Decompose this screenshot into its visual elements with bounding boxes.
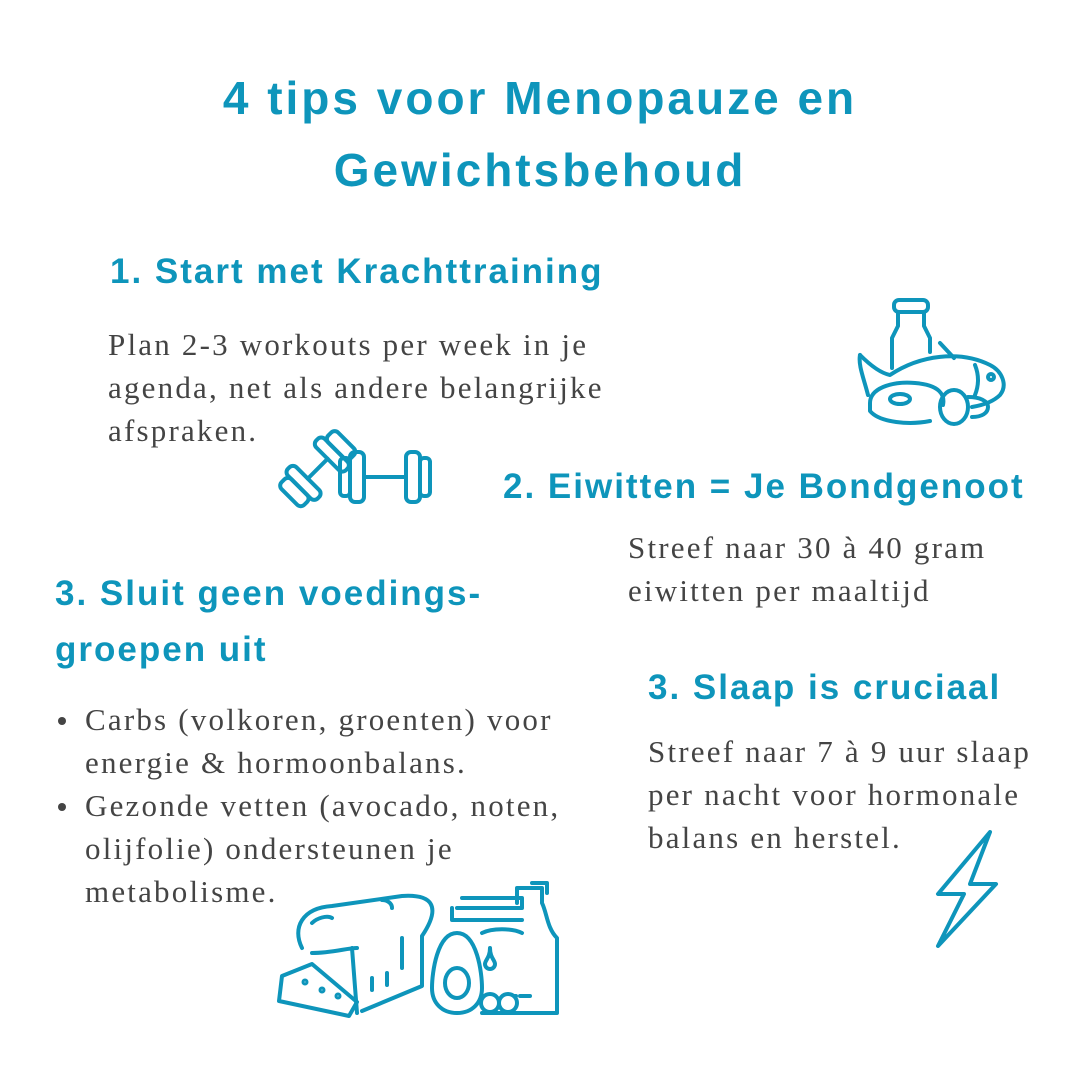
text 1: agenda, net als andere belangrijke [108,370,604,405]
heading 3: 3. Sluit geen voedings- [55,574,482,613]
title: Gewichtsbehoud [334,144,746,196]
bullet list [58,702,560,909]
text 4: Streef naar 7 à 9 uur slaap [648,734,1031,769]
text 1: afspraken. [108,413,258,448]
title: 4 tips voor Menopauze en [223,72,857,124]
text 4 [648,734,1031,855]
heading 2: 2. Eiwitten = Je Bondgenoot [503,467,1025,506]
heading 3: groepen uit [55,630,268,669]
bullet list: Gezonde vetten (avocado, noten, [85,788,560,823]
heading 1: 1. Start met Krachttraining [110,252,604,291]
bullet list: energie & hormoonbalans. [85,745,467,780]
bullet list: olijfolie) ondersteunen je [85,831,454,866]
bullet list: Carbs (volkoren, groenten) voor [85,702,553,737]
icon: protein foods [858,298,1006,426]
text 4: balans en herstel. [648,820,902,855]
icon: lightning [936,830,998,948]
bullet list: metabolisme. [85,874,278,909]
icon: dumbbells [278,429,432,508]
text 2: eiwitten per maaltijd [628,573,931,608]
heading 4: 3. Slaap is cruciaal [648,668,1001,707]
title [223,72,857,196]
text 2: Streef naar 30 à 40 gram [628,530,986,565]
icon: bread and fats [277,881,559,1018]
heading 3 [55,574,482,669]
text 2 [628,530,986,608]
text 4: per nacht voor hormonale [648,777,1020,812]
text 1 [108,327,604,448]
text 1: Plan 2-3 workouts per week in je [108,327,588,362]
